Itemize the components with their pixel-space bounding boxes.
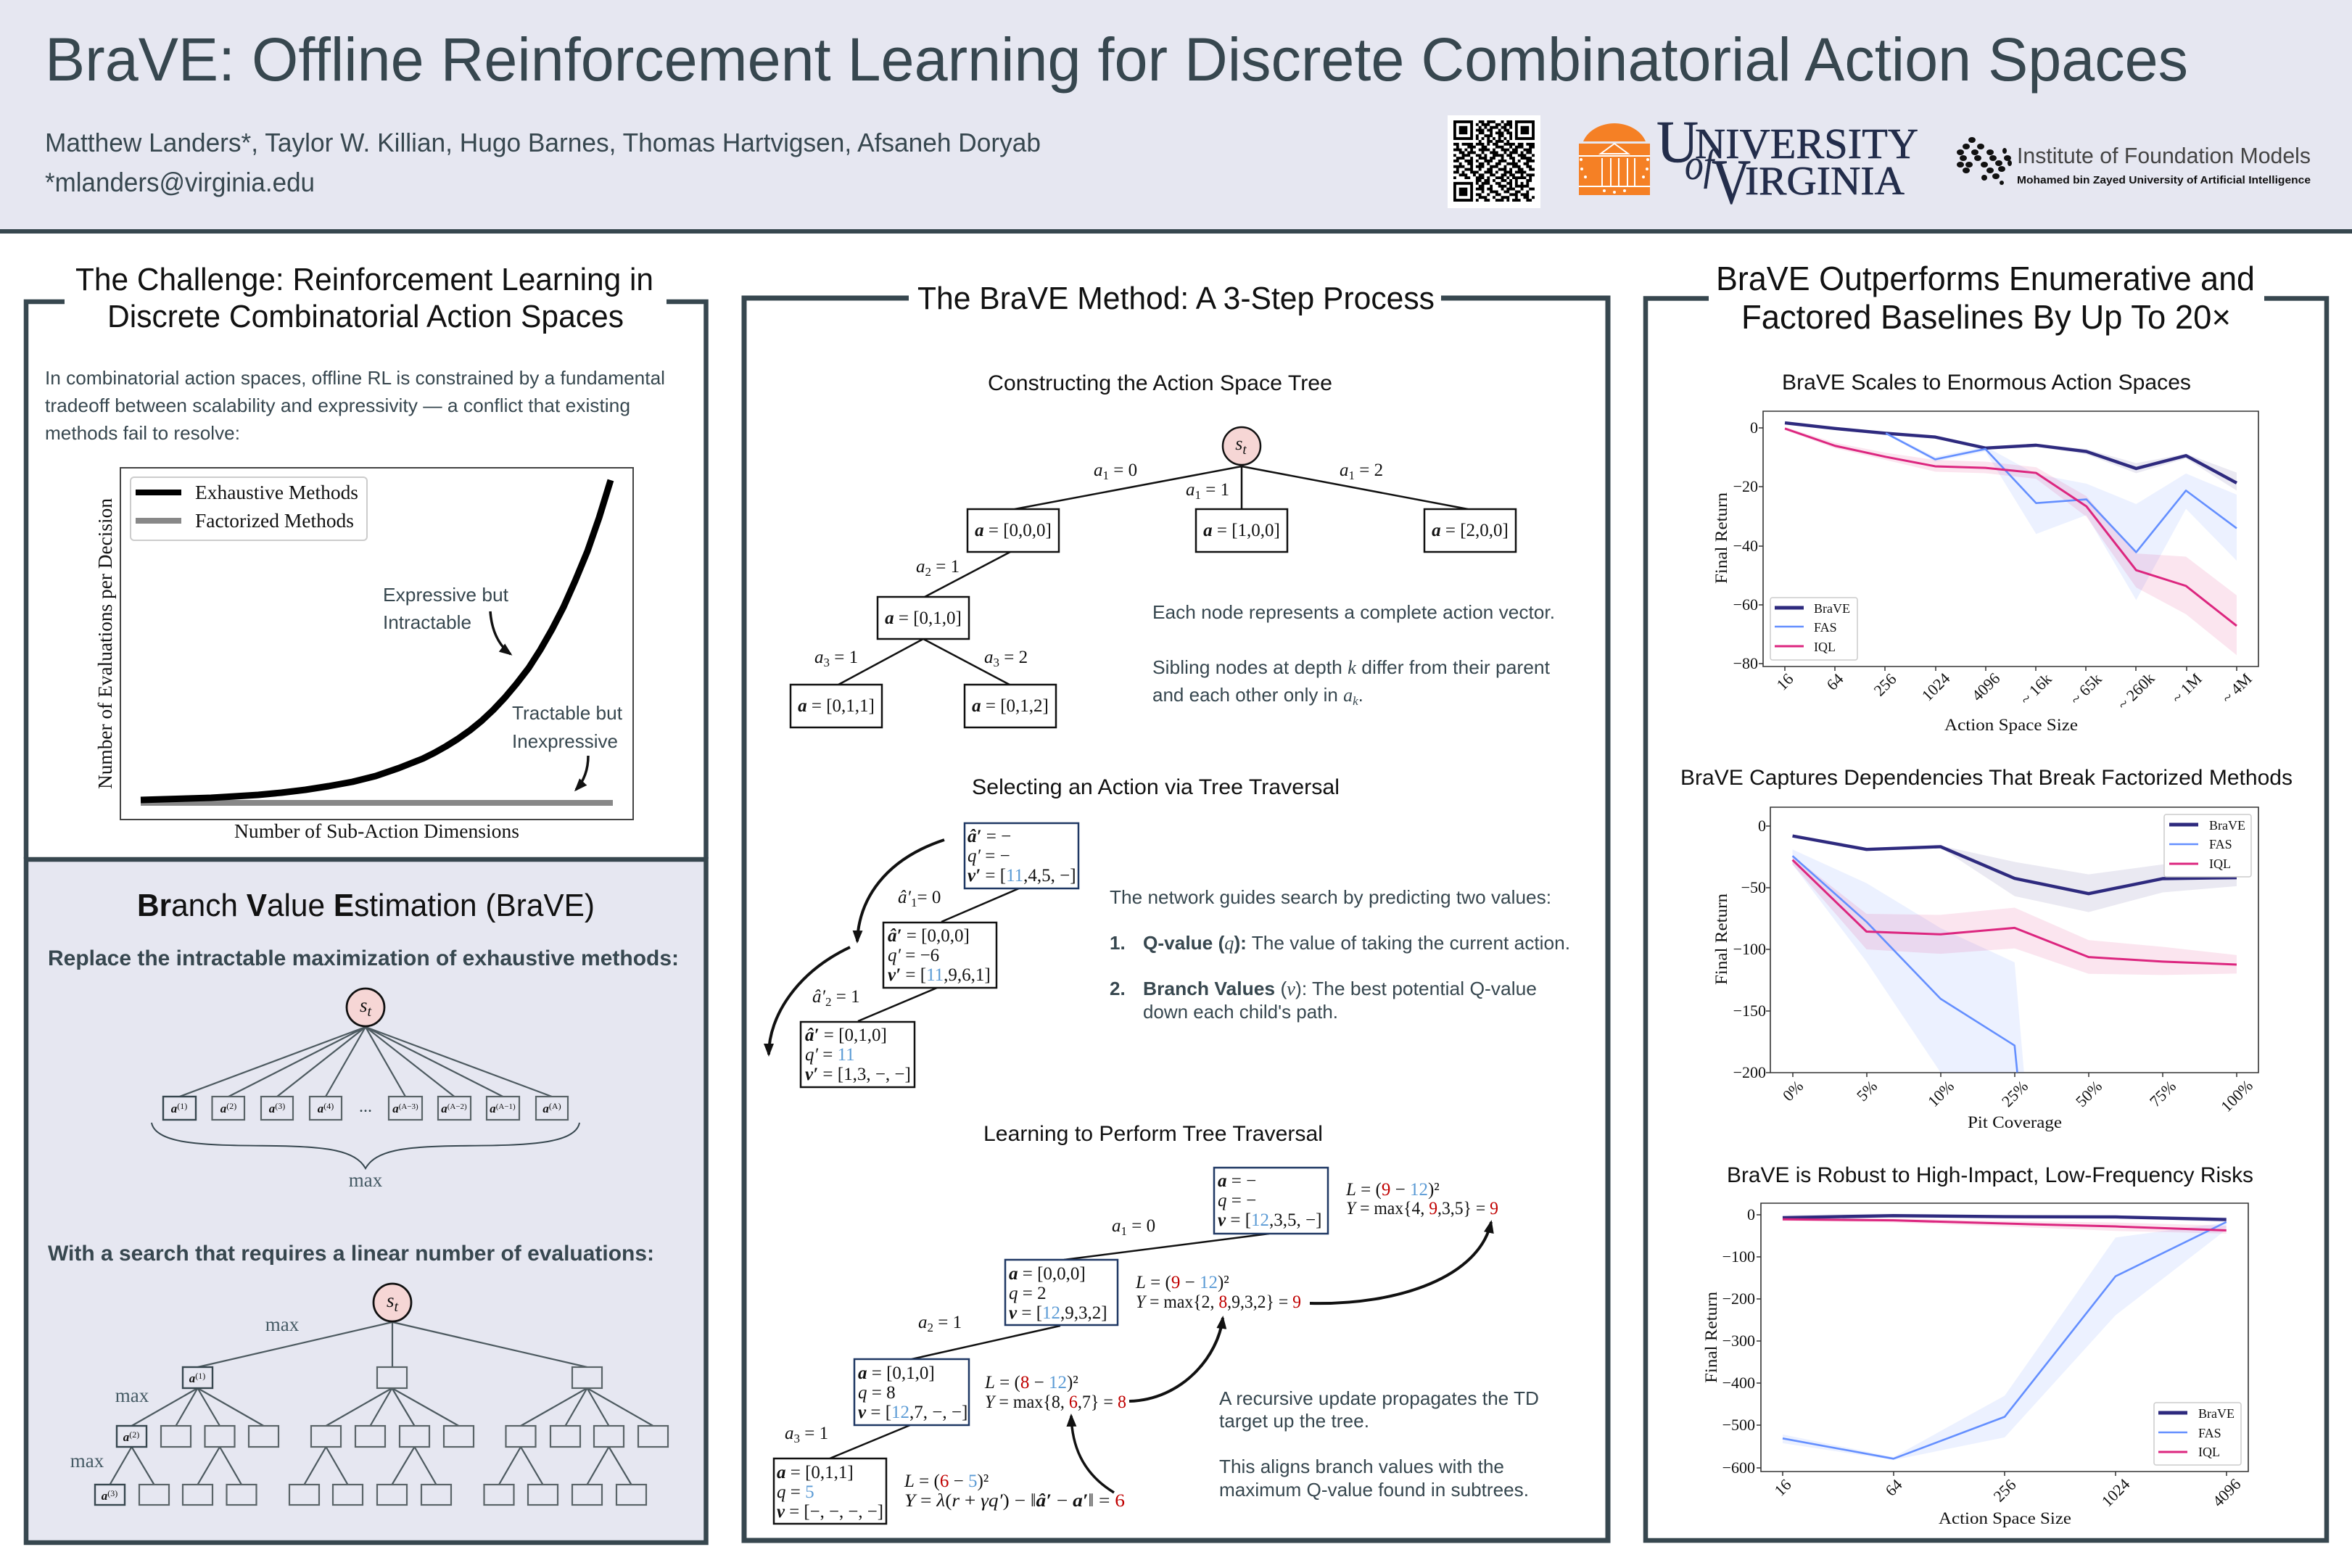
depth 1 nodes xyxy=(183,1367,602,1388)
step 1 explanation: Sibling nodes at depth k differ from their parent xyxy=(1152,656,1551,678)
chart legend: FAS xyxy=(2209,837,2232,851)
node C xyxy=(854,1359,969,1425)
edge labels: 3 xyxy=(824,656,830,669)
step 2 explanation: down each child's path. xyxy=(1143,1001,1338,1023)
equations: node B: L = (9 − 12)² xyxy=(1135,1273,1229,1292)
equations: node C: L = (8 − 12)² xyxy=(984,1373,1078,1392)
max labels: max xyxy=(70,1450,104,1472)
y tick labels xyxy=(1722,1205,1755,1477)
intro text xyxy=(45,367,665,444)
line chart 2 xyxy=(1712,807,2258,1131)
equations: node C: Y = max{8, 6,7} = 8 xyxy=(985,1392,1126,1412)
y tick labels xyxy=(1733,817,1766,1081)
third node: q′ = 11 xyxy=(805,1045,855,1065)
equations: node D xyxy=(904,1472,1125,1511)
UVA logo: IRGINIA xyxy=(1745,159,1905,204)
leaf actions: a xyxy=(542,1102,549,1115)
root node xyxy=(965,823,1078,888)
edge labels: 2 xyxy=(927,1321,933,1334)
x tick labels: ~ 65k xyxy=(2066,669,2105,709)
depth 2 nodes: a xyxy=(123,1430,130,1444)
root node: v′ = [11,4,5, −] xyxy=(967,866,1076,886)
step 2 explanation: Branch Values (v): The best potential Q-value xyxy=(1143,978,1537,999)
axis labels: Action Space Size xyxy=(1944,716,2078,734)
panel: the brave method xyxy=(744,281,1608,1540)
node A: v = [12,3,5, −] xyxy=(1218,1210,1321,1230)
node D: v = [−, −, −, −] xyxy=(777,1502,883,1522)
edge labels xyxy=(785,1216,1155,1445)
max labels xyxy=(70,1313,300,1472)
step 3 explanation: maximum Q-value found in subtrees. xyxy=(1219,1479,1529,1501)
root state xyxy=(347,989,384,1026)
node B: q = 2 xyxy=(1009,1284,1047,1303)
x tick labels: 10% xyxy=(1924,1077,1957,1110)
tree diagram xyxy=(791,427,1516,727)
step 2 explanation: Q-value (q): The value of taking the current action. xyxy=(1143,932,1570,954)
x tick labels: 64 xyxy=(1881,1475,1906,1500)
step 1: construct tree xyxy=(791,371,1555,727)
arrow: to factorized line xyxy=(576,756,588,790)
panel heading: Discrete Combinatorial Action Spaces xyxy=(107,299,624,334)
leaf actions: a xyxy=(318,1102,324,1115)
contact email: *mlanders@virginia.edu xyxy=(45,168,315,197)
edge labels: = 1 xyxy=(800,1424,828,1443)
leaf actions: (A) xyxy=(549,1101,561,1111)
chart heading 1: BraVE Scales to Enormous Action Spaces xyxy=(1782,371,2191,395)
root state: t xyxy=(1242,442,1247,458)
edge labels: 2 xyxy=(925,565,931,579)
x tick labels xyxy=(1773,669,2256,714)
chart legend: IQL xyxy=(2198,1445,2220,1459)
icon: rotunda xyxy=(1579,123,1650,195)
tick marks xyxy=(1759,428,2237,671)
x tick labels xyxy=(1779,1076,2256,1115)
max labels: max xyxy=(265,1313,300,1335)
university wordmark: U xyxy=(1656,108,1699,175)
depth 2 nodes: (2) xyxy=(129,1429,139,1440)
x tick labels: ~ 260k xyxy=(2113,669,2158,714)
axis labels: Final Return xyxy=(1712,893,1730,985)
y tick labels: −100 xyxy=(1733,940,1766,958)
action nodes: a = [0,1,0] xyxy=(885,608,962,628)
x tick labels: 1024 xyxy=(1918,669,1953,704)
root state xyxy=(374,1284,411,1321)
root node: â′ = − xyxy=(967,827,1011,846)
root state: s xyxy=(387,1290,394,1311)
edge labels: â′ xyxy=(812,987,825,1007)
y tick labels: −50 xyxy=(1741,878,1766,896)
tick marks xyxy=(1757,1215,2227,1476)
x tick labels: 4096 xyxy=(1968,669,2003,704)
step 1 explanation: and each other only in a xyxy=(1152,684,1353,706)
edge labels: 3 xyxy=(793,1432,800,1445)
line chart 3 xyxy=(1702,1203,2248,1527)
step 2 explanation xyxy=(1110,886,1570,1023)
chart heading 3: BraVE is Robust to High-Impact, Low-Frequency Risks xyxy=(1727,1163,2253,1187)
panel heading: Factored Baselines By Up To 20× xyxy=(1741,298,2231,336)
y tick labels: −200 xyxy=(1722,1290,1755,1308)
arrow: second selection xyxy=(769,947,850,1055)
depth 3 nodes xyxy=(95,1485,646,1505)
edge labels xyxy=(814,461,1383,669)
university name: Mohamed bin Zayed University of Artificial Intelligence xyxy=(2017,174,2311,186)
node C: q = 8 xyxy=(858,1383,896,1403)
leaf actions: (A−1) xyxy=(496,1102,516,1111)
UVA logo: NIVERSITY xyxy=(1695,120,1918,168)
edge labels: a xyxy=(918,1313,927,1332)
step heading: Selecting an Action via Tree Traversal xyxy=(972,775,1340,799)
panel: branch value estimation xyxy=(26,859,706,1543)
leaf actions: a xyxy=(220,1102,227,1115)
edge labels: â′ xyxy=(898,888,911,907)
y tick labels: 0 xyxy=(1758,817,1766,835)
annotation: expressive: Expressive but xyxy=(383,584,509,606)
y tick labels: −80 xyxy=(1733,654,1758,672)
uncertainty bands xyxy=(1785,421,2237,655)
arrow: C to B xyxy=(1129,1318,1223,1401)
edge labels: = 1 xyxy=(830,648,858,667)
action nodes: a = [0,1,1] xyxy=(798,696,875,716)
x tick labels: 4096 xyxy=(2209,1475,2244,1510)
axis labels xyxy=(1712,492,2078,734)
arrow: B to A xyxy=(1310,1222,1491,1303)
x tick labels: 256 xyxy=(1870,669,1900,700)
leaf actions: a xyxy=(490,1102,496,1115)
tick marks xyxy=(1766,826,2237,1077)
depth 1 nodes: (1) xyxy=(195,1371,205,1381)
axis labels: Pit Coverage xyxy=(1968,1113,2062,1131)
equations: node C xyxy=(984,1373,1126,1412)
step 2 explanation: 2. xyxy=(1110,978,1126,999)
chart: evaluations per decision xyxy=(94,468,633,842)
y tick labels xyxy=(1733,418,1758,672)
y tick labels: −400 xyxy=(1722,1374,1755,1392)
uncertainty bands xyxy=(1783,1213,2227,1460)
edge labels: a xyxy=(785,1424,793,1443)
series lines xyxy=(1785,423,2237,626)
action nodes: a = [0,1,2] xyxy=(972,696,1049,716)
edge labels: = 1 xyxy=(1201,480,1229,500)
chart legend xyxy=(2154,1403,2241,1465)
edge labels: 1 xyxy=(1195,488,1201,502)
leaf actions: (4) xyxy=(323,1101,334,1111)
step heading: Constructing the Action Space Tree xyxy=(988,371,1332,395)
factorized curve xyxy=(141,800,613,806)
step 3: learning xyxy=(774,1122,1539,1524)
brace xyxy=(152,1123,579,1168)
traversal diagram xyxy=(769,823,1078,1087)
x tick labels: 0% xyxy=(1779,1077,1807,1105)
annotation: tractable xyxy=(512,702,623,752)
action nodes: a = [2,0,0] xyxy=(1432,521,1509,540)
depth 3 nodes: a xyxy=(102,1489,108,1503)
action nodes: a = [0,0,0] xyxy=(975,521,1052,540)
node A: a = − xyxy=(1218,1171,1256,1191)
x tick labels xyxy=(1770,1475,2244,1510)
edge labels: 3 xyxy=(994,656,999,669)
UVA logo xyxy=(1579,108,1918,218)
y tick labels: −40 xyxy=(1733,537,1758,555)
QR code xyxy=(1448,115,1540,208)
max label: max xyxy=(349,1169,383,1191)
panel heading xyxy=(75,262,653,334)
title: BraVE: Offline Reinforcement Learning for Discrete Combinatorial Action Spaces xyxy=(45,25,2188,94)
y tick labels: −600 xyxy=(1722,1458,1755,1477)
edge labels: 1 xyxy=(911,896,917,909)
node B xyxy=(1005,1260,1118,1325)
node C: v = [12,7, −, −] xyxy=(858,1403,967,1422)
root state: s xyxy=(1235,433,1242,454)
step 1 explanation xyxy=(1152,601,1555,708)
leaf actions: (A−2) xyxy=(447,1102,467,1111)
edge labels: 1 xyxy=(1349,469,1355,482)
x tick labels: ~ 16k xyxy=(2016,669,2055,709)
edge labels xyxy=(812,888,941,1009)
x tick labels: 64 xyxy=(1823,669,1847,694)
series lines xyxy=(1783,1216,2227,1458)
node B: v = [12,9,3,2] xyxy=(1009,1303,1107,1323)
leaf actions: a xyxy=(269,1102,276,1115)
node A: q = − xyxy=(1218,1191,1256,1210)
root state xyxy=(1223,427,1260,465)
x tick labels: 25% xyxy=(1998,1077,2031,1110)
depth 2 nodes xyxy=(117,1426,668,1447)
step 1 explanation: . xyxy=(1358,684,1363,706)
header band xyxy=(0,0,2352,234)
step 3 explanation: target up the tree. xyxy=(1219,1410,1369,1432)
chart legend xyxy=(2164,814,2251,877)
y tick labels: 0 xyxy=(1747,1205,1755,1224)
third node xyxy=(801,1022,915,1087)
step 1 explanation: Each node represents a complete action vector. xyxy=(1152,601,1555,623)
node C: a = [0,1,0] xyxy=(858,1363,935,1383)
x tick labels: 75% xyxy=(2146,1077,2179,1110)
leaf actions: a xyxy=(171,1102,178,1115)
subheading: exhaustive: Replace the intractable maximization of exhaustive methods: xyxy=(48,946,679,970)
chart legend: BraVE xyxy=(1814,601,1850,616)
equations: node A: Y = max{4, 9,3,5} = 9 xyxy=(1346,1199,1498,1218)
x tick labels: ~ 1M xyxy=(2168,669,2205,707)
equations: node B: Y = max{2, 8,9,3,2} = 9 xyxy=(1136,1292,1301,1312)
leaf actions: ... xyxy=(359,1097,372,1116)
diagram: exhaustive tree xyxy=(152,989,579,1191)
chart legend: FAS xyxy=(2198,1426,2221,1440)
y tick labels: −500 xyxy=(1722,1416,1755,1434)
second node: q′ = −6 xyxy=(888,946,939,965)
intro text: methods fail to resolve: xyxy=(45,422,240,444)
icon: hexagon dots xyxy=(1957,137,2012,185)
third node: v′ = [1,3, −, −] xyxy=(805,1065,911,1084)
equations: node A: L = (9 − 12)² xyxy=(1345,1180,1440,1200)
uncertainty bands xyxy=(1793,835,2237,1073)
arrow: to exhaustive curve xyxy=(490,611,511,654)
intro text: tradeoff between scalability and expressivity — a conflict that existing xyxy=(45,395,630,416)
node B: a = [0,0,0] xyxy=(1009,1264,1086,1284)
x tick labels: 1024 xyxy=(2098,1475,2133,1510)
edge labels: a xyxy=(984,648,994,667)
edge labels: a xyxy=(1094,461,1102,480)
x tick labels: 256 xyxy=(1989,1475,2020,1506)
y axis label: Number of Evaluations per Decision xyxy=(94,498,116,789)
learning diagram xyxy=(774,1168,1498,1524)
depth 1 nodes: a xyxy=(189,1371,196,1385)
x tick labels: 50% xyxy=(2072,1077,2105,1110)
exhaustive curve xyxy=(141,480,611,800)
panel heading: Branch Value Estimation (BraVE) xyxy=(137,888,595,923)
y tick labels: −100 xyxy=(1722,1247,1755,1266)
x tick labels: 100% xyxy=(2217,1076,2256,1115)
leaf actions: (A−3) xyxy=(399,1102,418,1111)
edge labels: = 0 xyxy=(917,888,941,907)
node D xyxy=(774,1458,886,1524)
line chart 1 xyxy=(1712,411,2258,734)
action nodes: a = [1,0,0] xyxy=(1203,521,1280,540)
x tick labels: 5% xyxy=(1853,1077,1881,1105)
depth 3 nodes: (3) xyxy=(107,1488,117,1498)
root state: s xyxy=(360,994,367,1016)
axis labels: Final Return xyxy=(1712,492,1730,584)
step 2 explanation: 1. xyxy=(1110,932,1126,954)
annotation: expressive xyxy=(383,584,509,633)
step 2 explanation: The network guides search by predicting two values: xyxy=(1110,886,1551,908)
panel: results xyxy=(1646,260,2327,1540)
edge labels: a xyxy=(1186,480,1195,500)
second node: â′ = [0,0,0] xyxy=(888,926,970,946)
Institute of Foundation Models logo xyxy=(1957,137,2311,186)
edge labels: a xyxy=(1112,1216,1121,1236)
root state: t xyxy=(394,1299,398,1315)
step 2: tree traversal xyxy=(769,775,1570,1087)
edge labels: a xyxy=(814,648,824,667)
diagram: branch search tree xyxy=(70,1284,668,1505)
step 3 explanation: This aligns branch values with the xyxy=(1219,1456,1504,1477)
panel heading: BraVE Outperforms Enumerative and xyxy=(1716,260,2255,297)
node D: q = 5 xyxy=(777,1482,814,1502)
leaf actions: a xyxy=(392,1102,399,1115)
panel: the challenge xyxy=(26,262,706,859)
chart legend: IQL xyxy=(2209,857,2231,871)
edge labels: a xyxy=(1340,461,1349,480)
equations: node B xyxy=(1135,1273,1301,1312)
panel heading: The BraVE Method: A 3-Step Process xyxy=(917,281,1435,316)
x tick labels: 16 xyxy=(1773,669,1797,694)
node D: a = [0,1,1] xyxy=(777,1463,854,1482)
annotation: tractable: Inexpressive xyxy=(512,730,618,752)
y tick labels: 0 xyxy=(1750,418,1758,437)
x tick labels: 16 xyxy=(1770,1475,1795,1500)
leaf actions xyxy=(163,1097,568,1120)
chart legend xyxy=(1770,598,1857,660)
second node xyxy=(883,923,996,988)
leaf actions: a xyxy=(441,1102,447,1115)
equations: node D: Y = λ(r + γq′) − ‖â′ − a′‖ = 6 xyxy=(904,1491,1125,1511)
edge labels: = 0 xyxy=(1127,1216,1155,1236)
panel heading: The Challenge: Reinforcement Learning in xyxy=(75,262,653,297)
second node: v′ = [11,9,6,1] xyxy=(888,965,991,985)
subheading: linear search: With a search that requires a linear number of evaluations: xyxy=(48,1242,654,1266)
axis labels: Final Return xyxy=(1702,1291,1720,1383)
edge labels: 1 xyxy=(1102,469,1109,482)
edge labels: 1 xyxy=(1121,1224,1127,1238)
leaf actions: (2) xyxy=(226,1101,236,1111)
axis labels xyxy=(1712,893,2062,1131)
node A xyxy=(1214,1168,1328,1234)
leaf actions: (1) xyxy=(177,1101,187,1111)
authors: Matthew Landers*, Taylor W. Killian, Hugo Barnes, Thomas Hartvigsen, Afsaneh Doryab xyxy=(45,128,1041,157)
root state: t xyxy=(367,1004,371,1020)
edge labels: = 1 xyxy=(831,987,860,1007)
step 3 explanation: A recursive update propagates the TD xyxy=(1219,1387,1539,1409)
annotation: expressive: Intractable xyxy=(383,611,471,633)
institute name: Institute of Foundation Models xyxy=(2017,143,2311,168)
UVA logo: V xyxy=(1712,147,1751,218)
edge labels: = 2 xyxy=(1355,461,1383,480)
action nodes xyxy=(791,509,1516,727)
chart legend: BraVE xyxy=(2198,1406,2235,1421)
UVA logo: of xyxy=(1685,141,1718,189)
step 3 explanation xyxy=(1219,1387,1539,1501)
x axis label: Number of Sub-Action Dimensions xyxy=(234,820,519,842)
step 1 explanation: k xyxy=(1353,694,1358,708)
axis labels xyxy=(1702,1291,2071,1527)
edge labels: = 2 xyxy=(999,648,1028,667)
edge labels: = 1 xyxy=(933,1313,962,1332)
chart heading 2: BraVE Captures Dependencies That Break Factorized Methods xyxy=(1680,766,2293,790)
leaf actions: (3) xyxy=(275,1101,285,1111)
y tick labels: −20 xyxy=(1733,477,1758,495)
y tick labels: −60 xyxy=(1733,595,1758,614)
third node: â′ = [0,1,0] xyxy=(805,1026,887,1045)
edge labels: a xyxy=(916,557,925,577)
edge labels: = 0 xyxy=(1109,461,1137,480)
max labels: max xyxy=(115,1385,149,1406)
equations: node A xyxy=(1345,1180,1498,1218)
edge labels: = 1 xyxy=(931,557,960,577)
chart legend: FAS xyxy=(1814,620,1837,635)
chart legend xyxy=(131,477,367,540)
y tick labels: −200 xyxy=(1733,1063,1766,1081)
arrow: first selection xyxy=(857,840,944,941)
chart legend: Exhaustive Methods xyxy=(195,482,358,503)
chart legend: IQL xyxy=(1814,640,1836,654)
chart legend: BraVE xyxy=(2209,818,2245,833)
annotation: tractable: Tractable but xyxy=(512,702,623,724)
intro text: In combinatorial action spaces, offline RL is constrained by a fundamental xyxy=(45,367,665,389)
edge labels: 2 xyxy=(825,995,831,1009)
axis labels: Action Space Size xyxy=(1939,1509,2071,1527)
series lines xyxy=(1793,836,2237,1073)
chart legend: Factorized Methods xyxy=(195,510,354,532)
step heading: Learning to Perform Tree Traversal xyxy=(983,1122,1323,1146)
x tick labels: ~ 4M xyxy=(2218,669,2256,707)
y tick labels: −150 xyxy=(1733,1002,1766,1020)
y tick labels: −300 xyxy=(1722,1332,1755,1350)
equations: node D: L = (6 − 5)² xyxy=(904,1472,989,1491)
panel heading xyxy=(1716,260,2255,336)
arrow: D to C xyxy=(1071,1416,1114,1493)
root node: q′ = − xyxy=(967,846,1010,866)
